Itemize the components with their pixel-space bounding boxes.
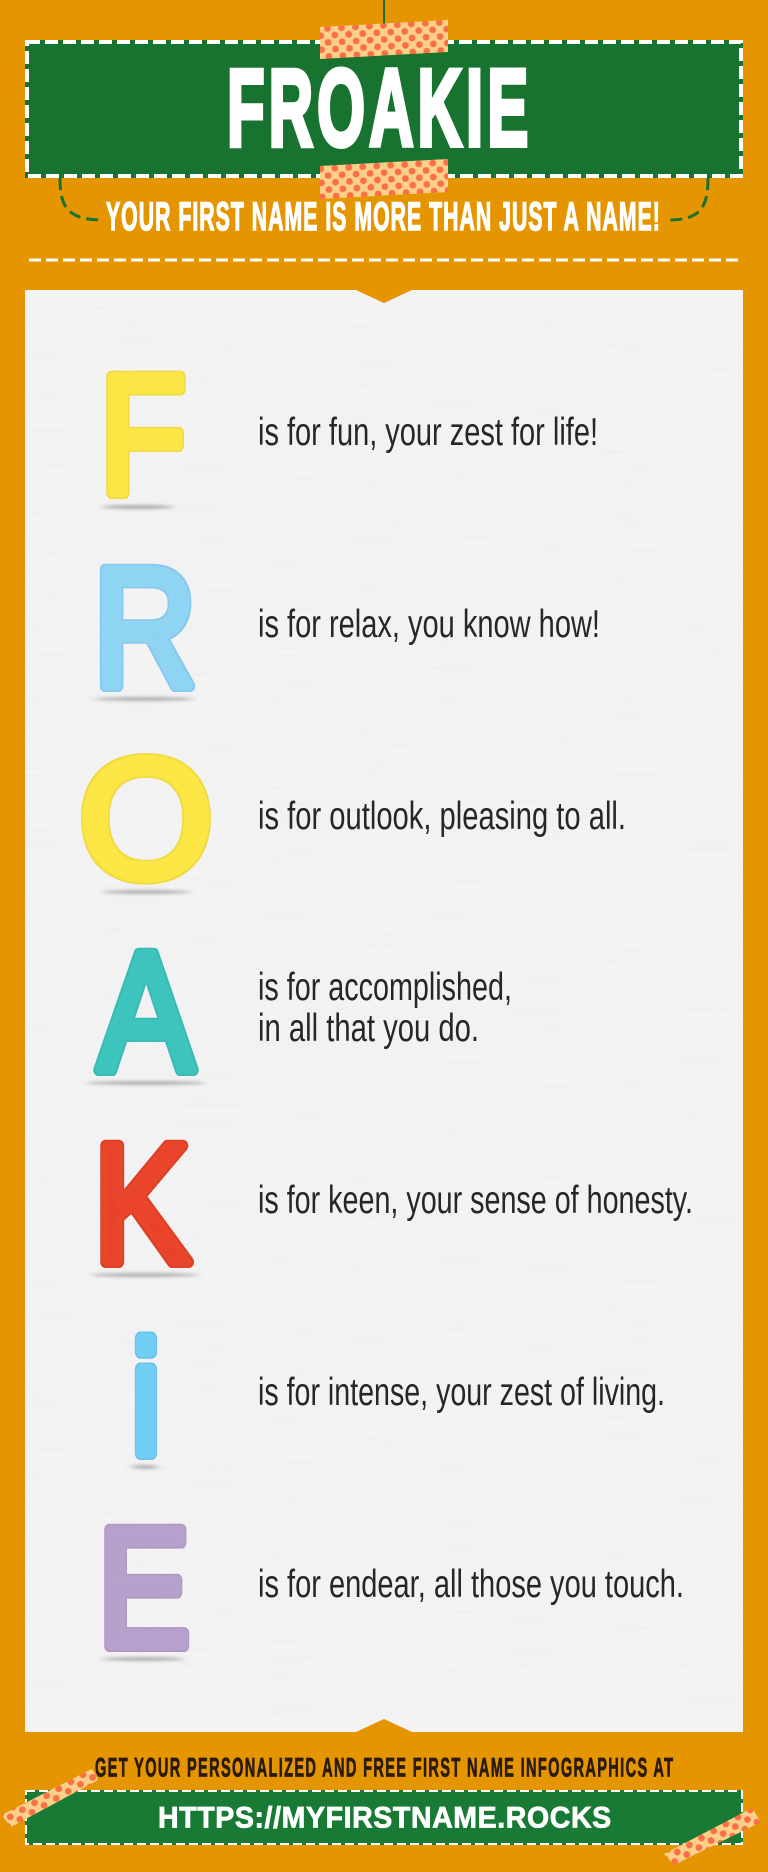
shadow bbox=[102, 890, 190, 894]
tagline: YOUR FIRST NAME IS MORE THAN JUST A NAME! bbox=[106, 194, 660, 239]
tape: footer left bbox=[2, 1769, 98, 1827]
tape: below title bbox=[320, 159, 448, 199]
letter E: E bbox=[98, 1493, 190, 1682]
shadow bbox=[102, 505, 174, 509]
text: is for accomplished, bbox=[258, 966, 512, 1009]
letter O: O bbox=[79, 725, 213, 914]
letter i: i bbox=[132, 1311, 160, 1487]
letter A: A bbox=[98, 918, 194, 1107]
shadow bbox=[131, 1465, 159, 1469]
shadow bbox=[102, 1657, 184, 1661]
shadow bbox=[91, 1273, 199, 1277]
hanging line bbox=[383, 0, 385, 24]
tape: top bbox=[320, 20, 448, 59]
row K bbox=[91, 1110, 693, 1298]
row F bbox=[100, 341, 598, 530]
text: is for relax, you know how! bbox=[258, 603, 600, 646]
row I bbox=[131, 1311, 665, 1487]
shadow bbox=[86, 1081, 206, 1085]
title: FROAKIE bbox=[227, 46, 528, 169]
dashed divider bbox=[29, 258, 738, 262]
footer prompt: GET YOUR PERSONALIZED AND FREE FIRST NAME INFOGRAPHICS AT bbox=[95, 1753, 673, 1783]
row O bbox=[79, 725, 626, 914]
row E bbox=[98, 1493, 684, 1682]
title banner bbox=[25, 40, 743, 178]
row A bbox=[86, 918, 512, 1107]
row R bbox=[93, 534, 600, 723]
connector: left bbox=[60, 178, 103, 220]
text: is for fun, your zest for life! bbox=[258, 411, 598, 454]
footer banner bbox=[25, 1790, 743, 1845]
text line 2: in all that you do. bbox=[258, 1007, 479, 1050]
footer url: HTTPS://MYFIRSTNAME.ROCKS bbox=[158, 1802, 611, 1835]
text: is for outlook, pleasing to all. bbox=[258, 795, 626, 838]
shadow bbox=[94, 697, 194, 701]
panel: name letters bbox=[25, 290, 743, 1732]
letter R: R bbox=[93, 534, 197, 723]
tape: footer right bbox=[664, 1808, 761, 1865]
connector: right bbox=[669, 178, 708, 220]
letter F: F bbox=[100, 341, 186, 530]
letter K: K bbox=[94, 1110, 190, 1298]
